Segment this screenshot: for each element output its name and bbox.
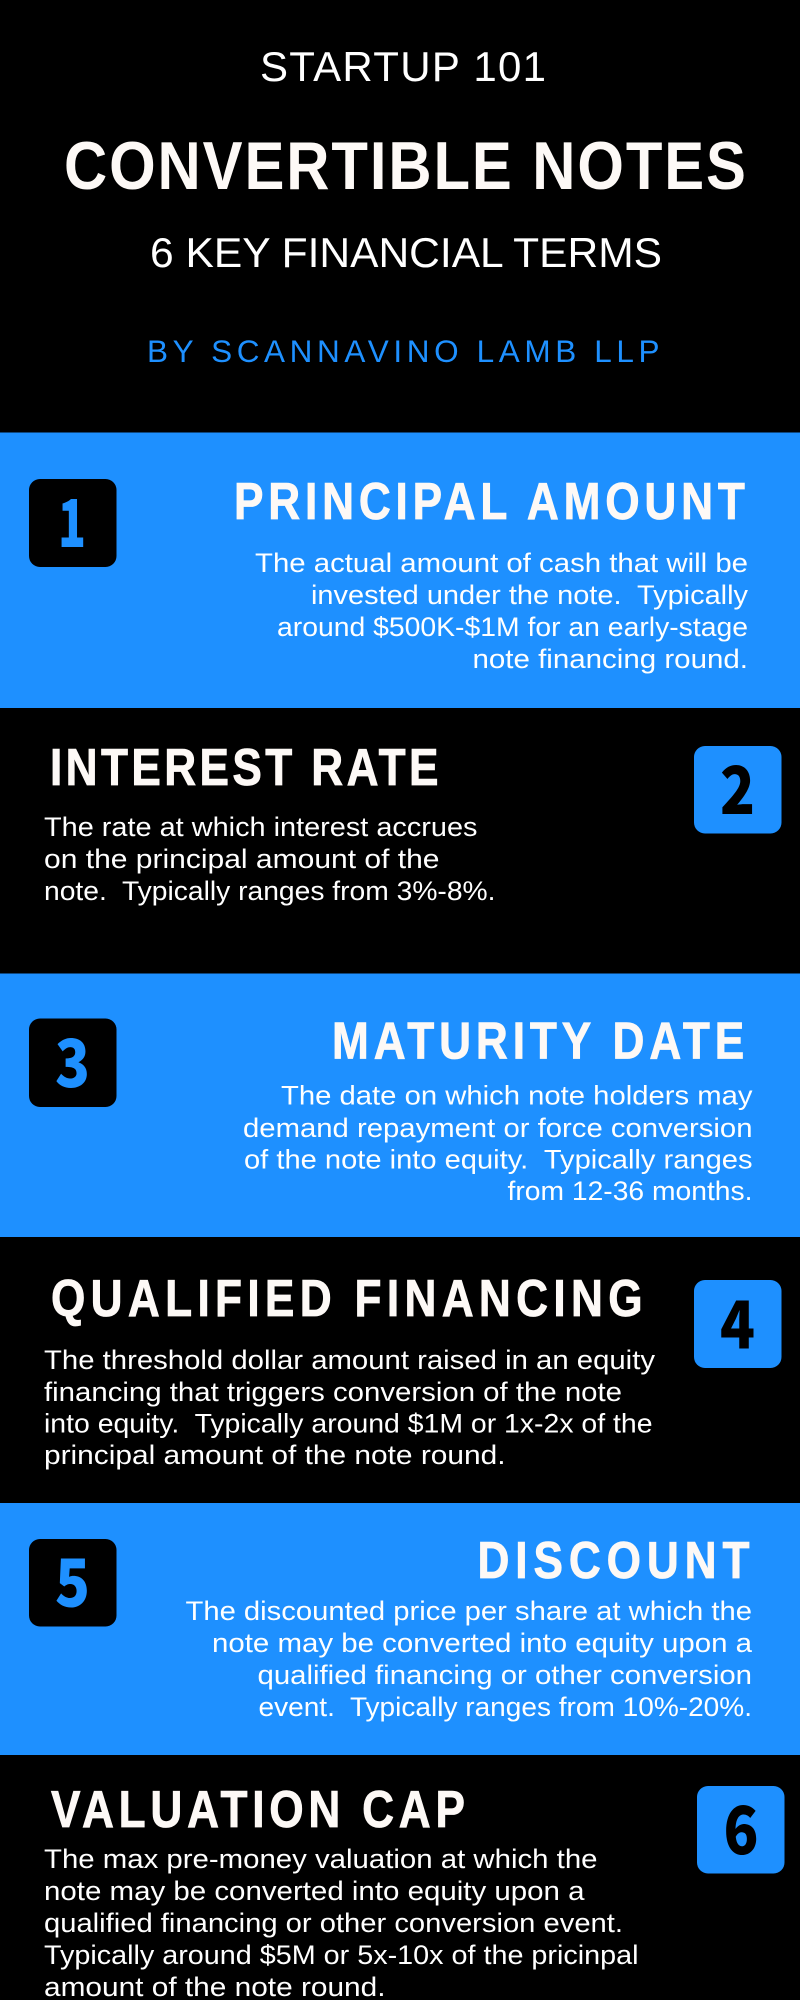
heading: interest rate: INTEREST RATE (50, 739, 438, 797)
badge: number 1: 1 (58, 471, 86, 567)
body: discount: note may be converted into equity upon a (212, 1628, 753, 1658)
badge: number 2 (694, 738, 782, 834)
badge: number 3: 3 (55, 1011, 90, 1107)
subtitle: 6 KEY FINANCIAL TERMS (150, 229, 662, 276)
badge: number 5 (29, 1530, 116, 1626)
eyebrow: Startup 101: STARTUP 101 (260, 43, 546, 90)
body: maturity date (243, 1080, 753, 1206)
body: maturity date: from 12-36 months. (508, 1176, 752, 1206)
body: principal amount: invested under the note. Typically (311, 580, 749, 610)
body: interest rate (44, 812, 496, 906)
heading: principal amount: PRINCIPAL AMOUNT (234, 473, 745, 531)
body: discount (186, 1596, 753, 1722)
body: interest rate: note. Typically ranges from 3%-8%. (44, 876, 496, 906)
heading: valuation cap: VALUATION CAP (51, 1781, 465, 1839)
title: CONVERTIBLE NOTES (64, 127, 746, 204)
badge: number 6 (697, 1778, 784, 1874)
badge: number 3 (29, 1011, 116, 1107)
badge: number 2: 2 (720, 738, 755, 834)
body: valuation cap: note may be converted into equity upon a (44, 1876, 586, 1906)
body: maturity date: of the note into equity. Typically ranges (244, 1144, 752, 1174)
panel: valuation cap (0, 1755, 800, 2000)
body: principal amount: around $500K-$1M for an early-stage (277, 612, 748, 642)
body: qualified financing: into equity. Typically around $1M or 1x-2x of the (44, 1408, 652, 1438)
badge: number 5: 5 (55, 1530, 90, 1626)
body: maturity date: demand repayment or force conversion (243, 1113, 752, 1143)
body: principal amount (255, 548, 749, 674)
panel: discount (0, 1503, 800, 1755)
body: qualified financing (44, 1345, 656, 1470)
body: discount: event. Typically ranges from 10%-20%. (258, 1692, 752, 1722)
body: principal amount: The actual amount of cash that will be (255, 548, 748, 578)
heading: maturity date: MATURITY DATE (332, 1012, 744, 1070)
panel: interest rate (0, 708, 800, 974)
badge: number 4 (694, 1272, 782, 1368)
header panel (0, 0, 800, 432)
body: qualified financing: The threshold dollar amount raised in an equity (44, 1345, 656, 1375)
body: qualified financing: financing that triggers conversion of the note (44, 1377, 622, 1407)
panel: qualified financing (0, 1237, 800, 1503)
body: qualified financing: principal amount of the note round. (44, 1440, 506, 1470)
badge: number 4: 4 (720, 1272, 755, 1368)
body: maturity date: The date on which note holders may (281, 1080, 753, 1110)
body: valuation cap: The max pre-money valuation at which the (44, 1844, 598, 1874)
panel: principal amount (0, 432, 800, 708)
body: discount: qualified financing or other conversion (258, 1660, 752, 1690)
body: interest rate: The rate at which interest accrues (44, 812, 477, 842)
body: valuation cap: Typically around $5M or 5x-10x of the pricinpal (44, 1940, 638, 1970)
panel: maturity date (0, 974, 800, 1237)
body: discount: The discounted price per share at which the (186, 1596, 752, 1626)
badge: number 6: 6 (724, 1778, 758, 1874)
byline: BY SCANNAVINO LAMB LLP (147, 333, 660, 369)
badge: number 1 (29, 471, 116, 567)
body: principal amount: note financing round. (472, 644, 748, 674)
body: interest rate: on the principal amount of the (44, 844, 440, 874)
body: valuation cap (44, 1844, 638, 2000)
body: valuation cap: qualified financing or other conversion event. (44, 1908, 623, 1938)
heading: discount: DISCOUNT (478, 1532, 750, 1590)
heading: qualified financing: QUALIFIED FINANCING (51, 1270, 643, 1328)
